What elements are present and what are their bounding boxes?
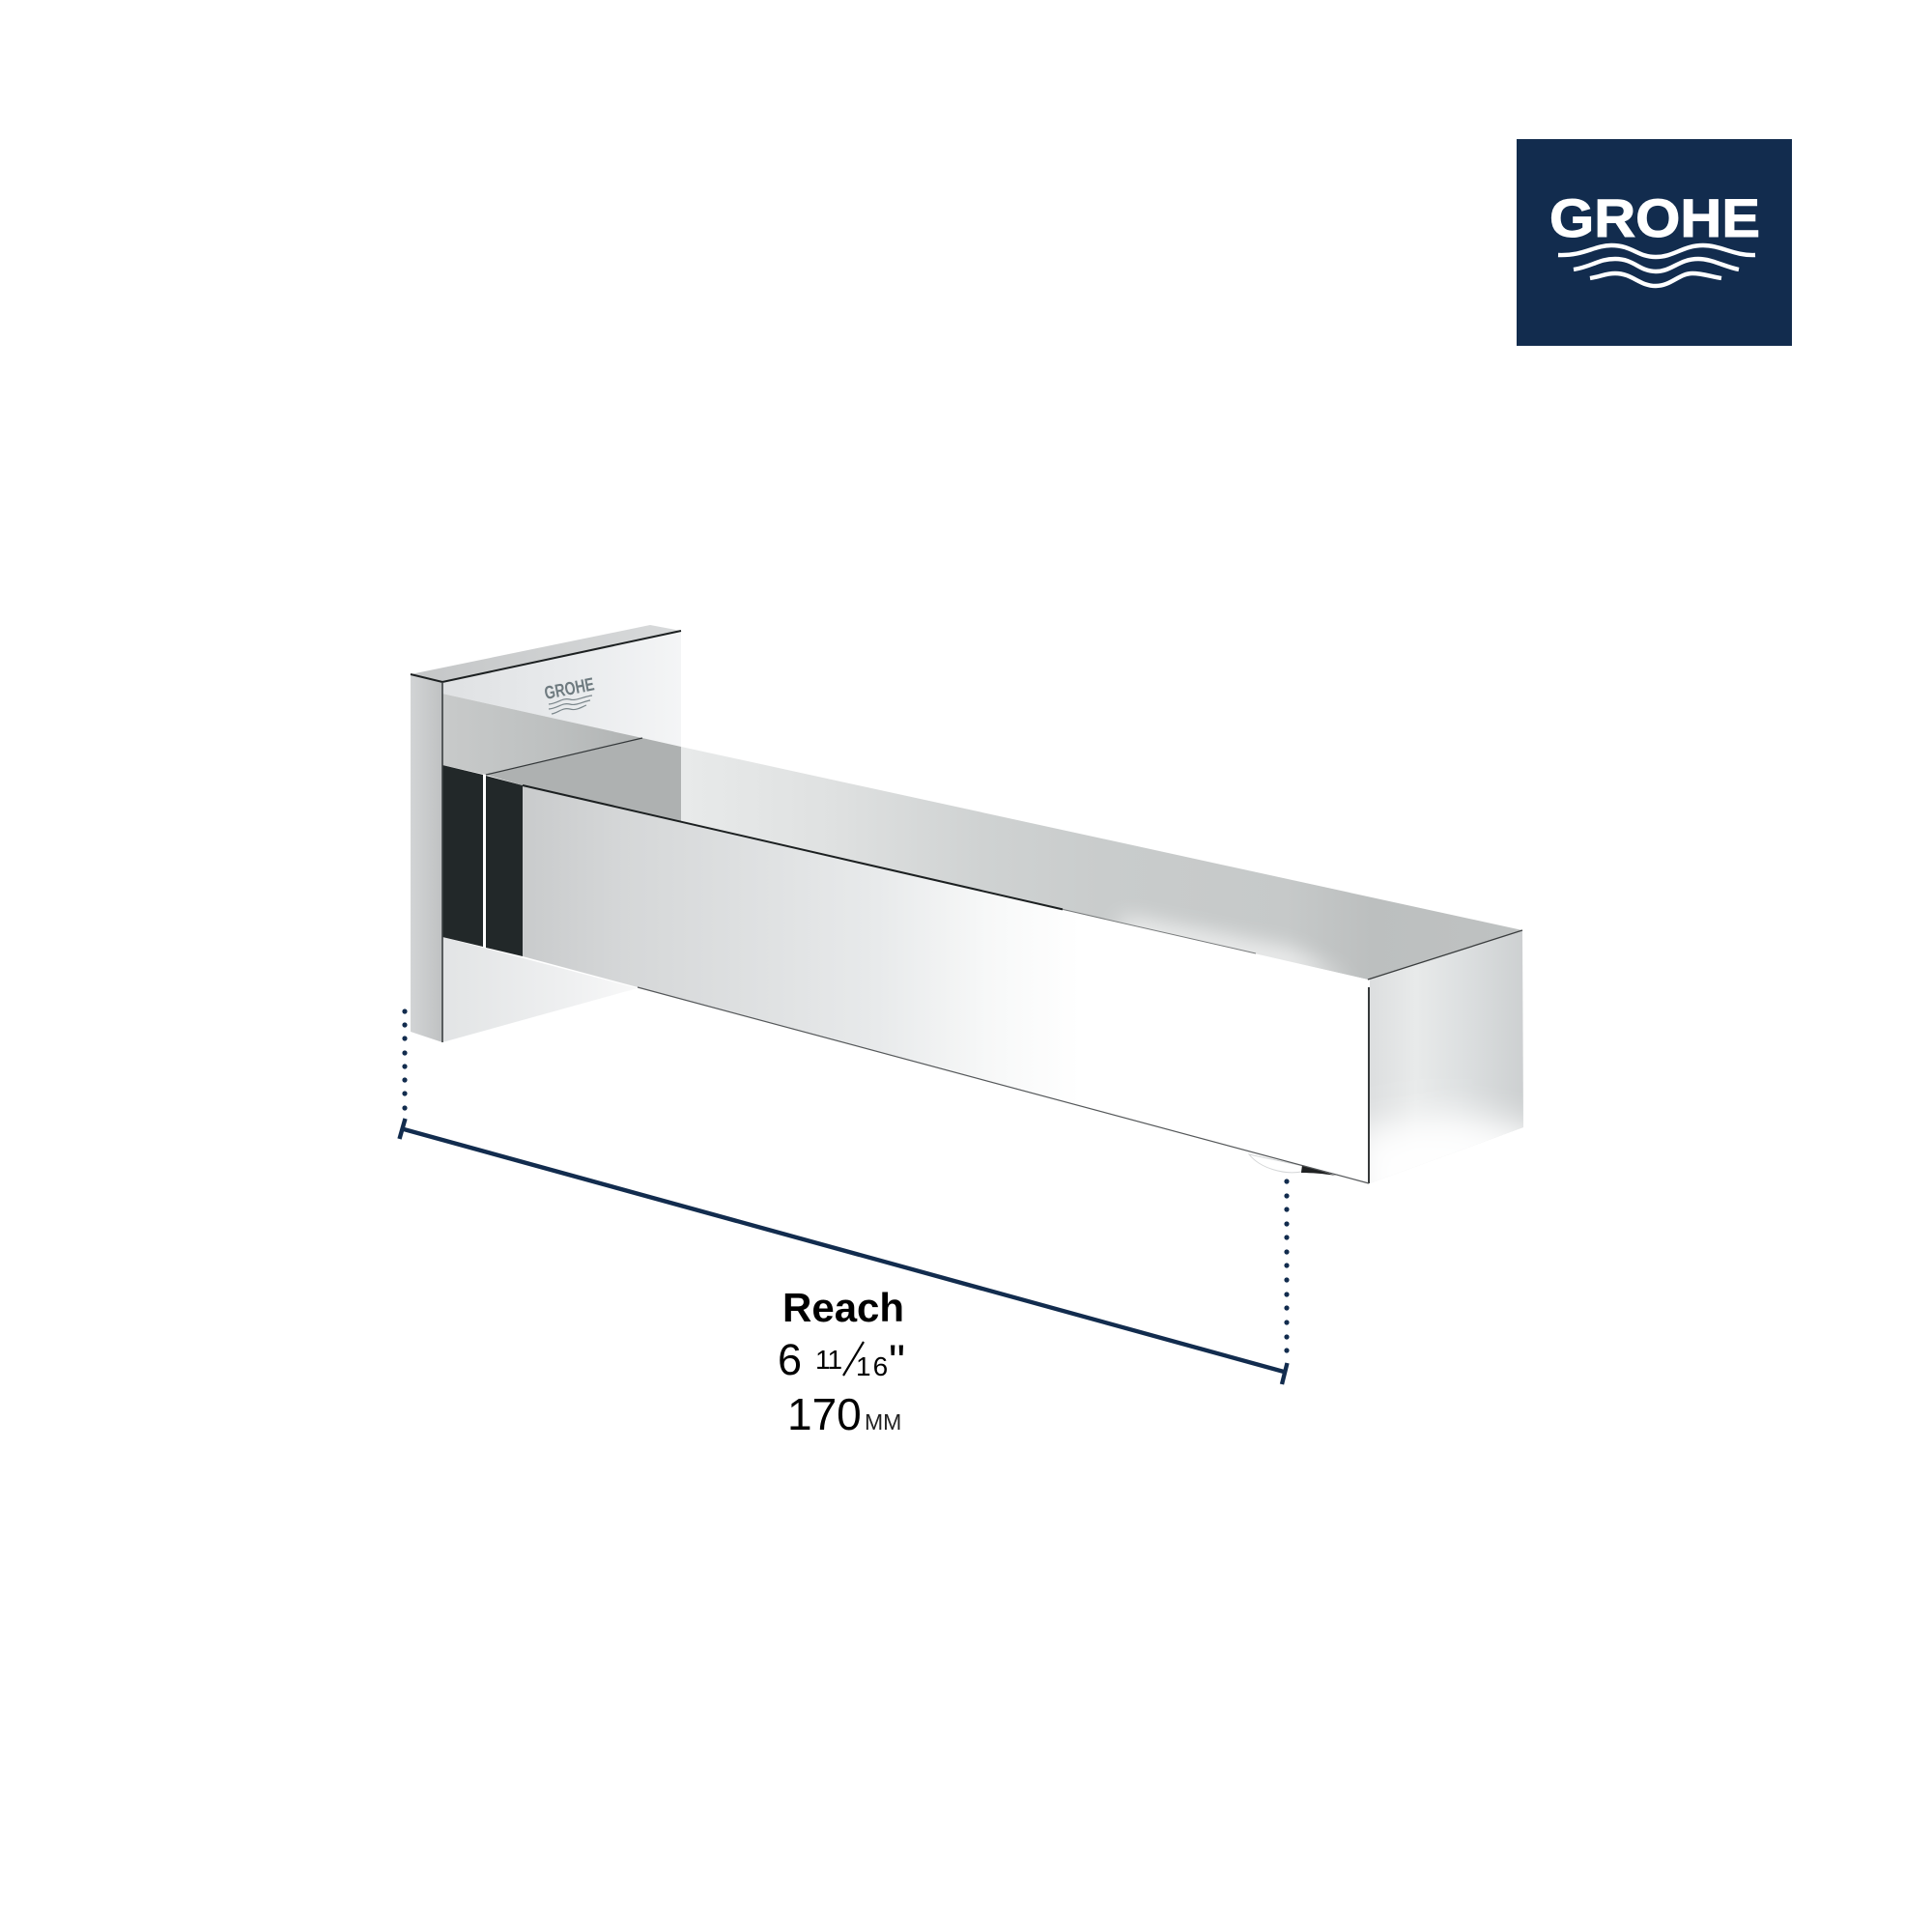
wall plate reflection	[442, 694, 642, 775]
GROHE logo	[1517, 139, 1792, 346]
inches value: "	[889, 1337, 905, 1388]
spout end face	[1370, 930, 1523, 1183]
wall plate top edge	[411, 625, 681, 682]
dark neck reflection	[442, 765, 483, 947]
reach dimension line	[400, 1009, 1290, 1384]
millimetres value: MM	[865, 1409, 901, 1435]
spout top face shaded part	[486, 738, 681, 822]
dimension line with end ticks	[400, 1119, 1287, 1384]
millimetres value	[787, 1389, 901, 1439]
logo wordmark: GROHE	[1549, 187, 1760, 248]
left dotted guide	[402, 1009, 408, 1111]
inches value: 11	[815, 1345, 841, 1375]
inches value: 6	[778, 1335, 802, 1384]
outlet	[1249, 1154, 1303, 1173]
millimetres value: 170	[787, 1389, 862, 1439]
edge lines	[411, 631, 1522, 1183]
wall plate front lower	[442, 937, 638, 1042]
reach label: Reach	[782, 1285, 904, 1330]
spout top face	[681, 747, 1522, 980]
reach label	[778, 1285, 905, 1439]
end face lower fade	[1370, 1102, 1523, 1183]
plate logo	[543, 674, 596, 714]
spout product illustration	[411, 625, 1546, 1217]
right dotted guide	[1284, 1179, 1290, 1353]
plate logo: GROHE	[543, 674, 596, 704]
spout front face	[523, 785, 1369, 1183]
inches value: 16	[856, 1351, 890, 1381]
wall plate side face	[411, 674, 442, 1042]
logo waves	[1558, 245, 1755, 286]
top face highlight	[1117, 912, 1339, 972]
wall plate front upper	[442, 631, 681, 747]
inches value	[778, 1335, 905, 1388]
